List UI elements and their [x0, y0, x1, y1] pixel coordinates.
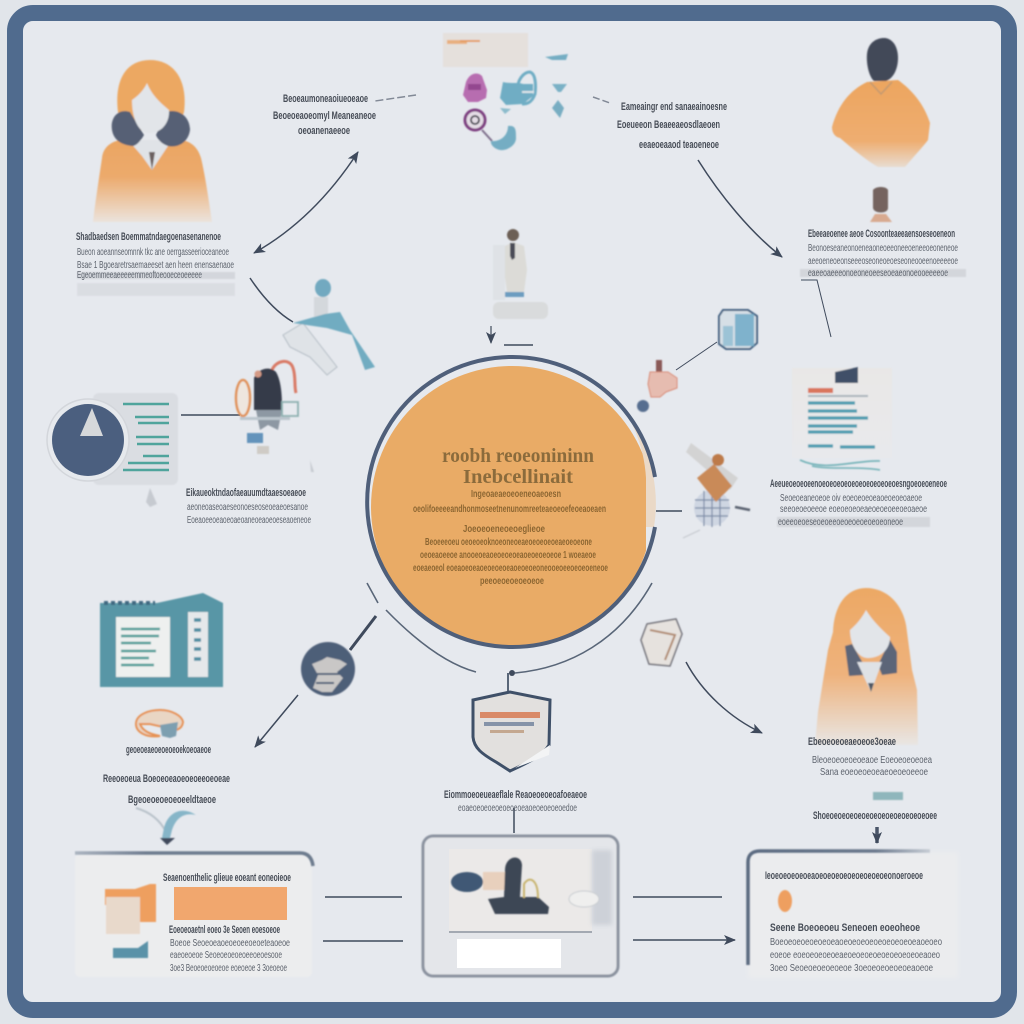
text block: left middle: Eoeaoeeoeaoeoaeoaneoeaoeoeseaoeneoe: [187, 515, 311, 526]
icon: figure on screen: [451, 858, 599, 914]
icon: swoosh arrow: [136, 808, 196, 845]
central text: Ingeoaeaeoeoeneoaeoesn: [471, 489, 561, 500]
text block: lower left: [103, 744, 230, 806]
icon: top centre cluster: [443, 33, 568, 150]
icon: goggles: [136, 710, 183, 738]
panel: bottom left card: [75, 853, 313, 977]
arrows: outer curved connectors: [181, 95, 831, 833]
panel: bottom right card: Ieoeoeoeoeoeaoeoeoeoeoeoeoeoeoeonoeroeoe: [765, 870, 923, 882]
panel: bottom left card: Seaenoenthelic glieue eoeant eoneoieoe: [163, 872, 291, 884]
icon: person lower right: [815, 588, 918, 745]
text block: top label right: Eameaingr end sanaeainoesne: [621, 101, 727, 113]
white bar: [457, 939, 561, 968]
text block: bottom centre: eoaeoeoeoeoeoeoeoeaoeoeoeoeoedoe: [458, 803, 577, 814]
central text: roobh reoeonininn: [442, 445, 594, 467]
icon: figure with locks: [236, 361, 298, 454]
text block: top label right: [617, 101, 727, 151]
icon: person at centre top: [493, 229, 527, 300]
text block: top label left: Beoeaumoneaoiueoeaoe: [283, 93, 368, 105]
central text: Inebcellinait: [463, 466, 573, 488]
panel: bottom right card: 3oeo Seoeoeoeoeoeoe 3oeoeoeoeoeoeaoeoe: [770, 963, 933, 974]
panel: bottom left card: Eoeoeoaetnl eoeo 3e Seoen eoesoeoe: [169, 924, 280, 936]
connector lines: [323, 897, 735, 941]
panel: bottom right card: eoeoe eoeoeoeoeoeaeoeoeoeoeoeoeoeoeoeaoeo: [770, 950, 940, 961]
panel: bottom right card: [748, 851, 958, 978]
central text: peeoeoeoeoeoeoe: [480, 576, 544, 587]
icon: round badge: [301, 642, 355, 696]
icon: small figure and dot: [637, 360, 677, 412]
small person icon right: [870, 187, 892, 222]
arrow: down to lower right card: [875, 827, 879, 843]
central text: [413, 445, 608, 587]
icon: compass card left: [47, 393, 178, 485]
icon: pale base under centre person: [493, 302, 548, 319]
text block: upper right: [800, 228, 966, 279]
text block: right middle: [770, 478, 947, 528]
ring arcs under circle: [367, 583, 652, 692]
text block: right middle: seeoeoeoeeoe eoeoeoeoeaeoeoeoeeoeoaeoe: [780, 504, 927, 515]
central text: Joeoeoeneoeoeglieoe: [463, 524, 545, 535]
icon: telescope and globe: [683, 443, 750, 538]
text block: top label left: Beoeoeaoeomyl Meaneaneoe: [273, 110, 376, 122]
text block: lower left: Bgeoeoeoeoeoeeldtaeoe: [128, 794, 216, 806]
text block: right middle: eoeeoeoeseoeoeeoeoeoeoeoeoeoneoe: [778, 517, 903, 528]
central text: oeolifoeeeeandhonmoseetnenunomreeteaeoeoefeoeaoeaen: [413, 504, 606, 515]
text block: upper right: eaeeoaeeeonoeoneoeeseoeaeonoeooeeeeoe: [808, 268, 948, 279]
panel: bottom right card: Boeoeoeoeoeoeoeaoeoeoeoeoeoeoeoeoeaoeoeo: [770, 937, 942, 948]
text block: top label left: [273, 93, 376, 137]
text block: right middle: Seoeoeaneoeoe oiv eoeoeoeoeaoeoeoeoaeoe: [780, 493, 922, 504]
icon: figure seated on chair: [283, 279, 375, 375]
text block: lower right: [808, 736, 937, 822]
text block: top left person: [76, 231, 235, 296]
text block: top left person: Bsae 1 Bgoearetrsaemaeeset aen heen enensaenaoe: [77, 260, 234, 271]
central circle: [367, 357, 656, 648]
text block: lower left: geoeoeaeoeoeoeoekoeoaeoe: [126, 744, 211, 756]
text block: lower right: Shoeoeoeoeoeoeoeoeoeoeoeoeoeoee: [813, 810, 937, 822]
icon: shield: [473, 692, 550, 771]
text block: bottom centre: [444, 789, 587, 814]
panel: bottom right card: Seene Boeoeoeu Seneoen eoeoheoe: [770, 922, 920, 934]
icon: calendar panel left: [100, 593, 223, 687]
text block: top label right: Eoeueeon Beaeeaeosdlaeoen: [617, 119, 720, 131]
icon: blue cube right: [719, 310, 757, 349]
icon: orange folder: [105, 884, 156, 958]
arrow glyphs left faint: [146, 460, 314, 507]
text block: top label left: oeoanenaeeoe: [298, 125, 350, 137]
orange block: [174, 887, 287, 920]
panel: bottom left card: Boeoe Seoeoeaoeoeoeeoeoeteaoeoe: [170, 938, 290, 949]
central text: oeoeaoeeoe anooeoeaoeoeoeoeaoeoeoeoeoe 1 woeaeoe: [420, 550, 596, 561]
central text: Beoeeeoeu oeoeoeoknoeoneoeaeoeoeoeoeaeoeoeone: [425, 537, 592, 548]
panel: bottom left card: 3oe3 Beoeoeoeoeoe eoeoeoe 3 3oeoeoe: [170, 963, 287, 974]
text block: left middle: aeoneoaseoaeseonoeseoseoeaeoesanoe: [187, 502, 308, 513]
text block: bottom centre: Eiommoeoeueaeflale Reaoeoeoeoafoeaeoe: [444, 789, 587, 801]
icon: document right: [792, 367, 892, 470]
icon: paper card lower right of circle: [641, 619, 682, 666]
text block: top label right: eeaeoeaaod teaoeneoe: [639, 139, 719, 151]
text block: lower right: Bleoeoeoeoeoeaoe Eoeoeoeoeoea: [812, 755, 932, 766]
icon: small orange tag: [778, 890, 792, 912]
text block: lower right: Ebeoeoeoeaeoeoe3oeae: [808, 736, 896, 748]
icon: person top left: [93, 60, 212, 222]
panel: bottom centre screen: [423, 836, 618, 976]
text block: top left person: Shadbaedsen Boemmatndaegoenasenanenoe: [76, 231, 221, 243]
text block: top left person: Egeoemmeeaeeeeemmeoftoeooeceoeeeee: [77, 270, 202, 281]
text block: left middle: Eikaueoktndaofaeauumdtaaesoeaeoe: [186, 487, 306, 499]
text block: top left person: Bueon aoeannseomnnk tkc ane oerrgasseerioceaneoe: [77, 247, 229, 258]
text block: lower left: Reeoeoeua Boeoeoeaoeoeoeeoeoeae: [103, 773, 230, 785]
panel: bottom left card: eaeoeoeoe Seoeoeoeoeoeeoeoesooe: [170, 950, 282, 961]
central text: eoeaeoeol eoeaoeoeaoeoeoeoeaoeoeoeoneooeoeeoeoeoeneoe: [413, 563, 608, 574]
text block: left middle: [186, 487, 311, 526]
icon: person top right: [832, 38, 930, 167]
text block: lower right: Sana eoeoeoeoeaeoeoeoeeoe: [820, 767, 928, 778]
